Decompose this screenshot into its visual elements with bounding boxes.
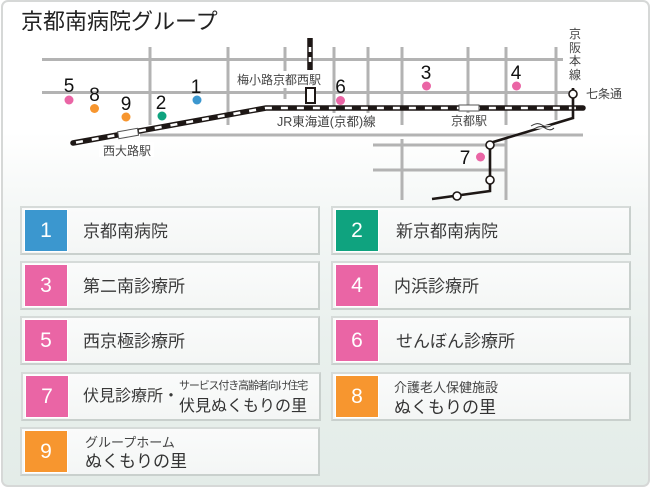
card 1 (20, 206, 320, 255)
station labels: 西大路駅 (103, 143, 151, 158)
marker numbers: 9 (121, 94, 131, 115)
station labels: 七条通 (586, 87, 622, 101)
station labels: 京都駅 (451, 114, 487, 128)
card 8 (331, 372, 631, 421)
marker numbers: 5 (64, 76, 74, 97)
number badge 3: 3 (40, 274, 52, 297)
station labels: 線 (569, 67, 581, 82)
station labels: 京 (569, 27, 581, 41)
Keihan stations (453, 90, 577, 200)
number badge 6: 6 (351, 329, 363, 352)
marker numbers: 8 (89, 85, 100, 106)
station labels: 本 (569, 54, 581, 68)
subtitle: 介護老人保健施設 (394, 380, 498, 395)
marker numbers: 3 (421, 63, 431, 84)
name: 第二南診療所 (83, 277, 185, 296)
subtitle: サービス付き高齢者向け住宅 (179, 380, 307, 392)
location markers (64, 82, 521, 162)
number badge 9 (25, 431, 67, 472)
number badge 6 (336, 320, 378, 361)
name: 京都南病院 (83, 222, 168, 241)
number badge 1: 1 (40, 219, 52, 242)
marker numbers: 4 (511, 63, 522, 84)
number badge 2: 2 (351, 219, 363, 242)
name: せんぼん診療所 (396, 332, 515, 351)
card 3 (20, 261, 320, 310)
card 6 (331, 316, 631, 365)
route map (42, 27, 622, 201)
name: 新京都南病院 (396, 222, 498, 241)
number badge 3 (25, 265, 67, 306)
facility name: ぬくもりの里 (85, 452, 187, 471)
station: Kyoto (459, 105, 479, 111)
number badge 5: 5 (40, 329, 52, 352)
number badge 7: 7 (41, 385, 53, 408)
name: 内浜診療所 (394, 277, 479, 296)
marker numbers: 2 (156, 93, 166, 114)
marker numbers: 6 (335, 77, 346, 98)
marker numbers: 7 (460, 148, 470, 169)
title: 京都南病院グループ (21, 9, 218, 34)
roads (42, 47, 583, 200)
station labels (103, 27, 622, 158)
card 4 (331, 261, 631, 310)
number badge 4: 4 (351, 274, 363, 297)
name: 西京極診療所 (83, 332, 185, 351)
railway: JR Tokaido line (73, 108, 583, 143)
facility name: 伏見ぬくもりの里 (179, 398, 307, 415)
number badge 7 (26, 376, 68, 417)
railway: Sagano line, north of Umekoji (307, 38, 313, 70)
marker numbers (64, 63, 522, 169)
line break mark (531, 124, 554, 130)
number badge 4 (336, 265, 378, 306)
railway: Keihan main line (432, 88, 573, 199)
name: 伏見診療所・ (83, 388, 179, 405)
facility name: ぬくもりの里 (394, 398, 496, 417)
station labels: 梅小路京都西駅 (237, 72, 321, 87)
number badge 8 (336, 376, 378, 417)
card 2 (331, 206, 631, 255)
card 7 (21, 372, 321, 421)
label backgrounds (99, 26, 633, 157)
station labels: JR東海道(京都)線 (277, 114, 376, 129)
marker numbers: 1 (191, 77, 201, 98)
card 9 (20, 427, 320, 476)
number badge 2 (336, 210, 378, 251)
number badge 5 (25, 320, 67, 361)
number badge 1 (25, 210, 67, 251)
station labels: 阪 (569, 41, 581, 55)
number badge 8: 8 (351, 385, 363, 408)
subtitle: グループホーム (85, 435, 175, 450)
station: Nishioji (118, 128, 139, 139)
card 5 (20, 316, 320, 365)
station: Umekoji-Kyotonishi (306, 88, 315, 103)
number badge 9: 9 (40, 440, 52, 463)
